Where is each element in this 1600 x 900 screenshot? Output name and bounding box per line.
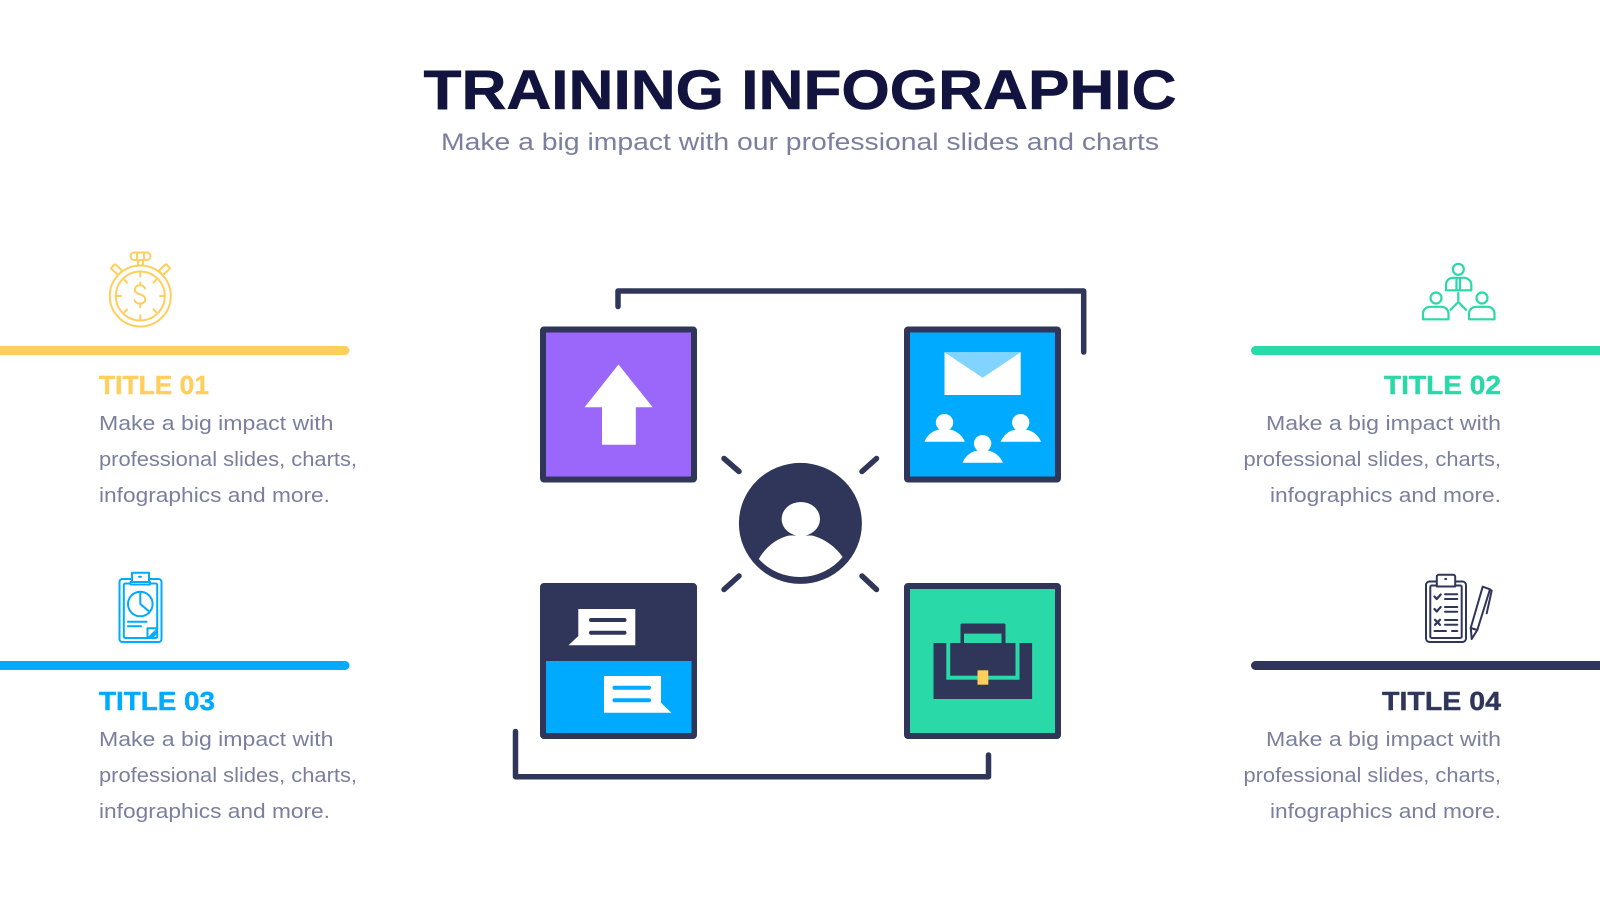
accent bar [0, 346, 350, 355]
rays around central badge [724, 458, 876, 590]
icon: team hierarchy [1423, 264, 1494, 319]
text block [1244, 729, 1501, 823]
icon: stopwatch with dollar sign [110, 252, 171, 326]
text block: professional slides, charts, [1244, 449, 1501, 471]
icon: three people [924, 414, 1041, 463]
panel: purple square with upload arrow [543, 330, 694, 480]
accent bar [0, 661, 350, 670]
text block: professional slides, charts, [1244, 765, 1501, 787]
accent bar [1251, 661, 1600, 670]
text block: Make a big impact with [99, 413, 334, 435]
panel: title 03 [0, 573, 357, 823]
text block: infographics and more. [1270, 485, 1501, 507]
panel: title 02 [1244, 264, 1600, 507]
arrow: bottom bracket connector [516, 732, 988, 777]
text block: Make a big impact with [1266, 413, 1501, 435]
text block: Make a big impact with [1266, 729, 1501, 751]
panel: title 01 [0, 252, 357, 507]
panel: title 04 [1244, 575, 1600, 823]
text block: infographics and more. [1270, 801, 1501, 823]
heading: TITLE 02 [1384, 370, 1501, 400]
icon: bottom speech bubble [604, 676, 671, 713]
panel: conversation square [543, 586, 694, 736]
icon: checklist clipboard and pen [1426, 575, 1492, 642]
subtitle: Make a big impact with our professional slides and charts [441, 129, 1159, 156]
icon: clipboard with pie chart [120, 573, 162, 642]
icon: envelope [944, 352, 1021, 395]
text block: professional slides, charts, [99, 765, 357, 787]
heading: TITLE 01 [99, 370, 209, 400]
heading: TITLE 04 [1382, 686, 1502, 716]
text block: Make a big impact with [99, 729, 334, 751]
icon: up arrow [585, 364, 653, 445]
text block: infographics and more. [99, 801, 330, 823]
heading: TITLE 03 [99, 686, 215, 716]
panel: green square with briefcase [907, 586, 1058, 736]
text block: infographics and more. [99, 485, 330, 507]
accent bar [1251, 346, 1600, 355]
text block: professional slides, charts, [99, 449, 357, 471]
panel: blue square with envelope and people [907, 330, 1058, 480]
icon: briefcase [934, 624, 1032, 699]
text block [99, 413, 357, 507]
title: TRAINING INFOGRAPHIC [424, 58, 1176, 121]
arrow: top bracket connector [618, 291, 1084, 352]
text block [1244, 413, 1501, 507]
text block [99, 729, 357, 823]
icon: central person badge [739, 463, 862, 584]
icon: top speech bubble [568, 609, 635, 645]
